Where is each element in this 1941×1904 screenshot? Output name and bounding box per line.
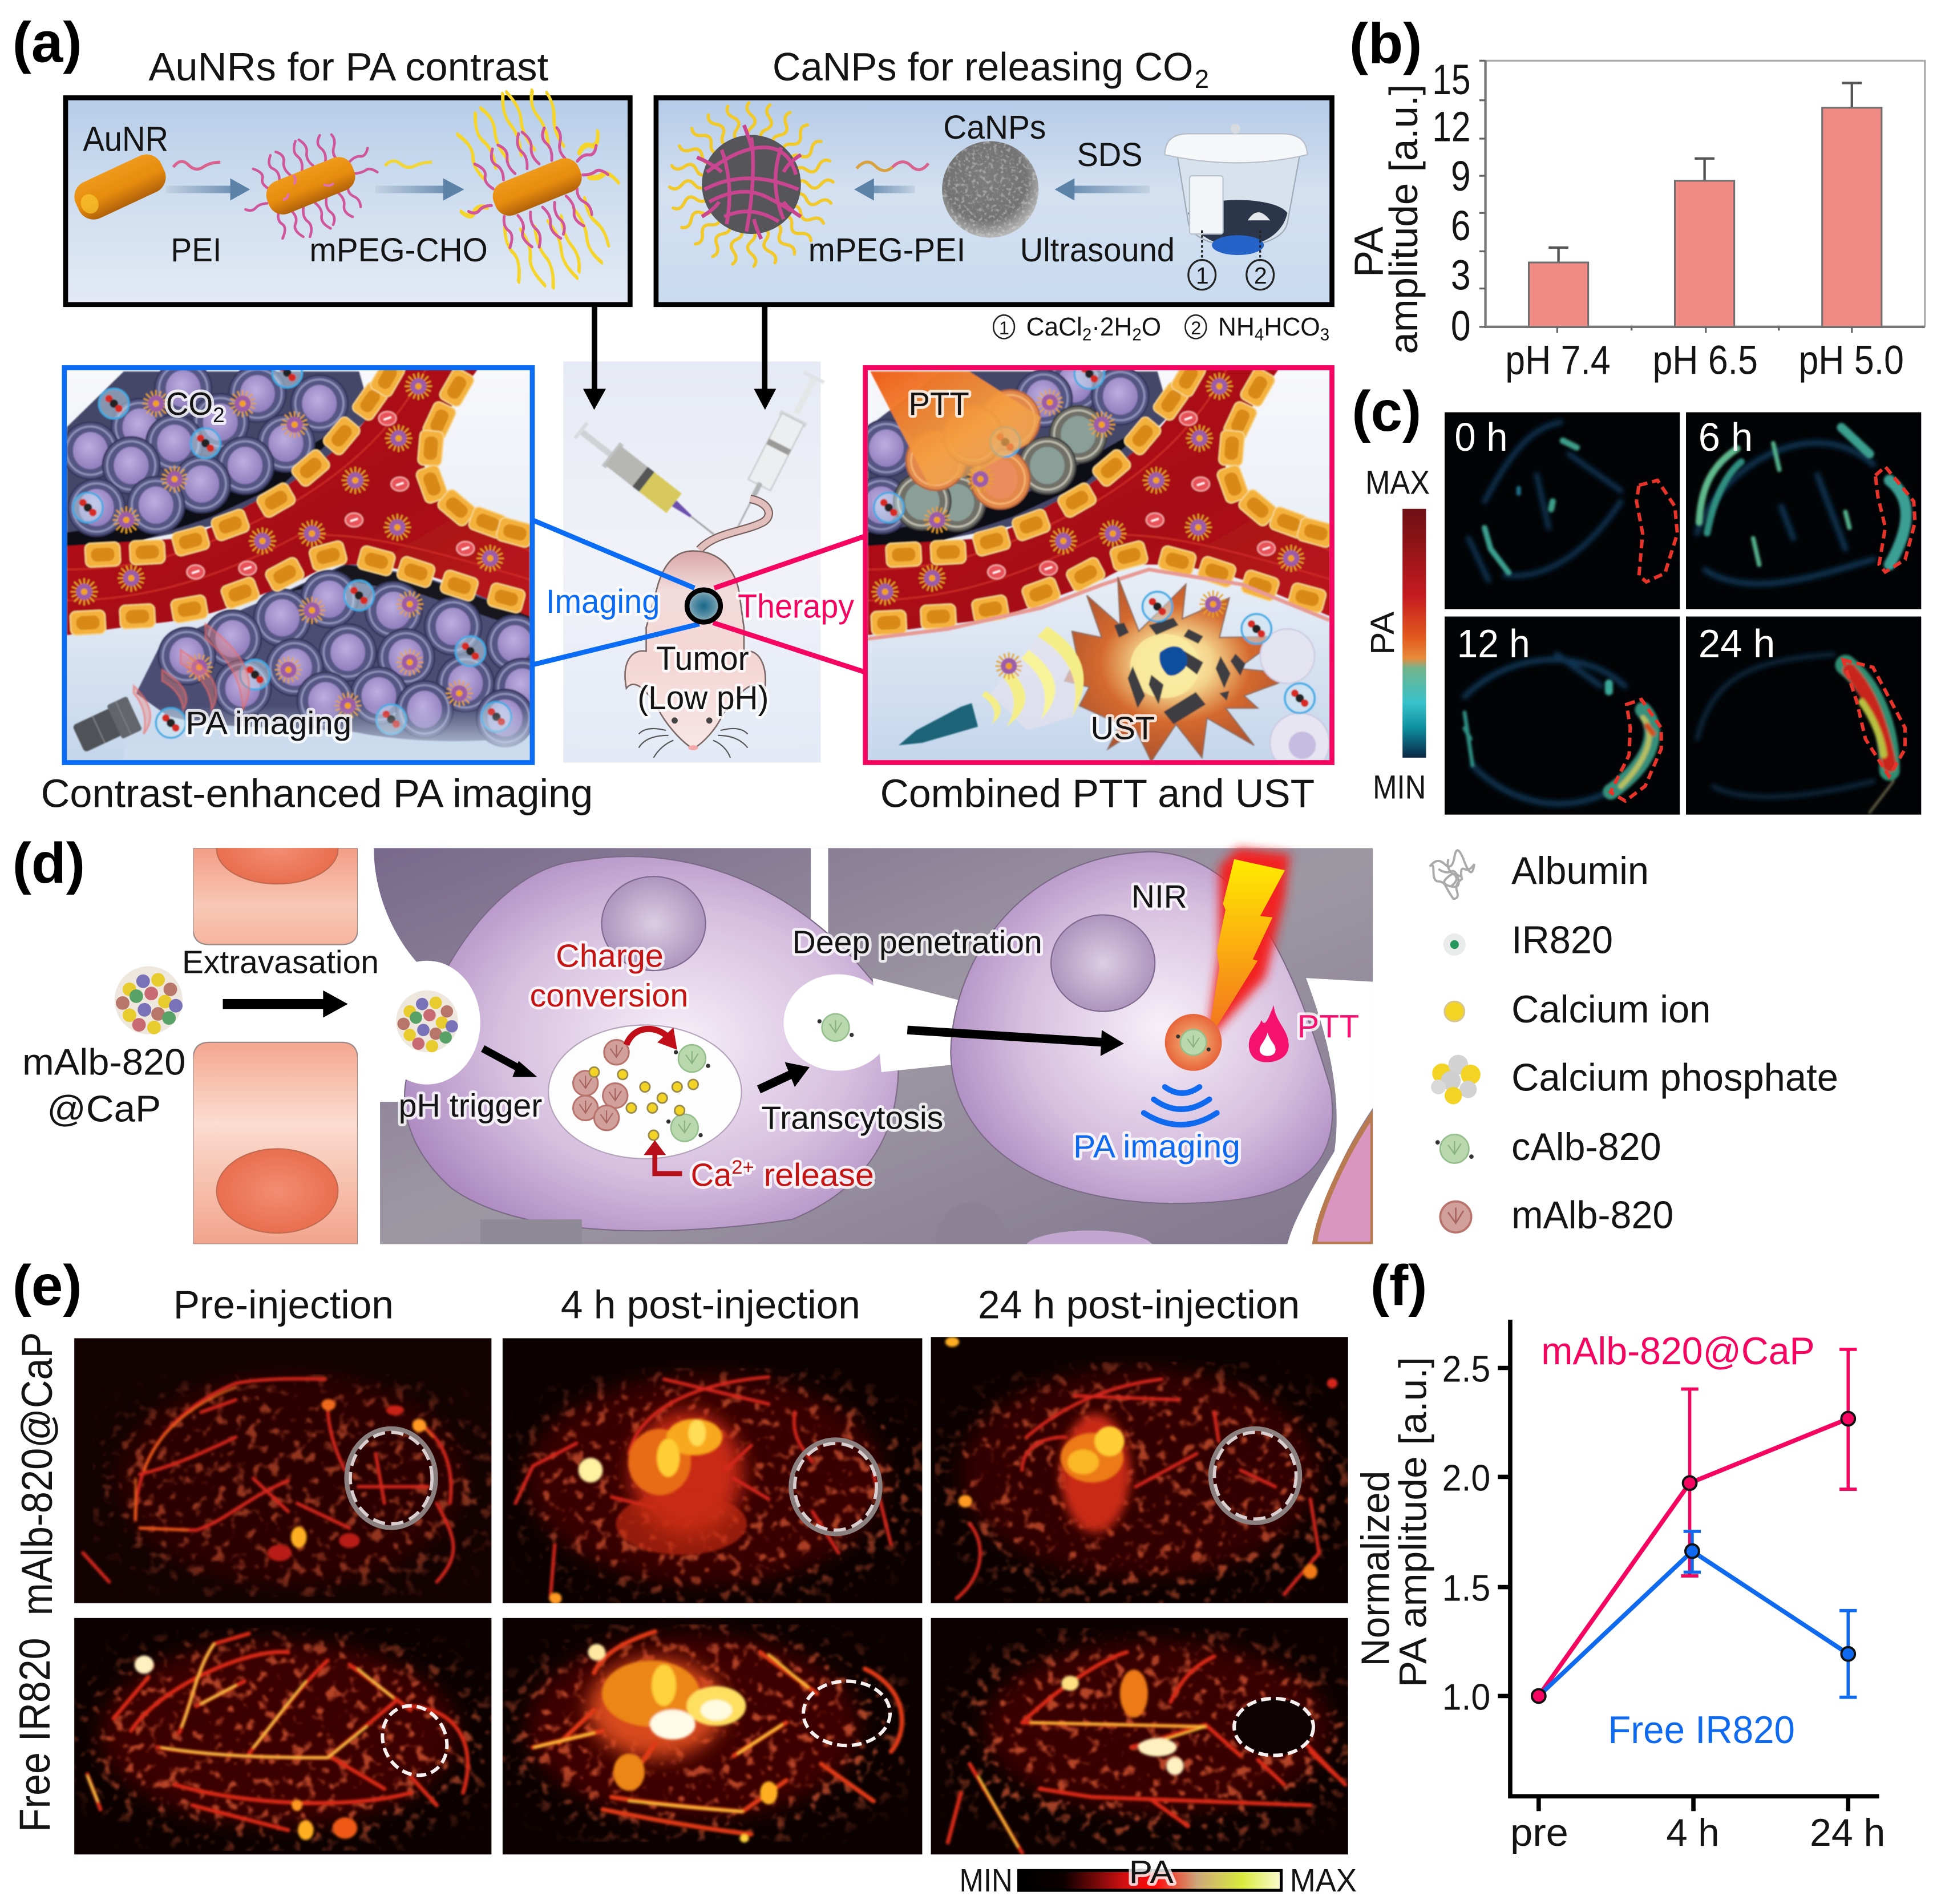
y-axis tick labels: 0 <box>1451 302 1471 350</box>
calcium release arrow <box>644 1140 682 1174</box>
arrow 2 <box>375 178 464 201</box>
cAlb in right pocket <box>818 1014 854 1041</box>
CaP label: @CaP <box>47 1088 161 1130</box>
icon: CaNP micrograph sphere <box>942 141 1038 238</box>
legend: mAlb-820 <box>1440 1194 1673 1236</box>
PEI label: PEI <box>171 232 221 269</box>
panel d: mechanism schematic <box>13 815 1838 1265</box>
y-axis title <box>1353 1357 1434 1687</box>
time label: 6 h <box>1699 415 1753 459</box>
nucleus <box>1051 915 1155 1012</box>
image 0 h <box>1445 413 1680 609</box>
Charge conversion label: Charge <box>556 938 664 974</box>
right-bottom cells <box>480 1114 1373 1265</box>
column titles <box>173 1283 1300 1327</box>
CO2 label: CO <box>166 386 213 422</box>
right pocket <box>783 975 892 1071</box>
heading: CaNPs: CaNPs for releasing CO <box>773 45 1194 89</box>
icon: PA waves <box>1144 1087 1217 1125</box>
Therapy label: Therapy <box>738 588 855 625</box>
CO2 label: 2 <box>213 403 225 427</box>
MAX label: MAX <box>1365 464 1430 502</box>
arrow: to transcytosis <box>759 1062 810 1089</box>
right white gap <box>1287 978 1373 1244</box>
panel: combined PTT and UST illustration <box>853 355 1336 773</box>
legend: IR820: IR820 <box>1511 919 1613 962</box>
x-axis labels <box>1505 337 1904 383</box>
legend: calcium phosphate <box>1431 1055 1838 1104</box>
AuNR label: AuNR <box>83 120 168 159</box>
footnote: reagents: 3 <box>1320 326 1329 345</box>
caption: combined: Combined PTT and UST <box>880 771 1315 816</box>
x-axis labels: pH 7.4 <box>1505 337 1611 383</box>
panel label f: (f) <box>1370 1254 1427 1317</box>
footnote: reagents: 2 <box>1082 326 1091 345</box>
bar pH 7.4 <box>1529 248 1588 327</box>
Ca release label: 2+ <box>731 1157 754 1178</box>
mPEG-CHO label: mPEG-CHO <box>309 232 488 269</box>
arrow: extravasation <box>223 991 348 1017</box>
connector lines: therapy <box>713 536 866 672</box>
NIR label: NIR <box>1131 878 1187 914</box>
nanoparticle in pocket <box>396 991 458 1052</box>
CaNPs label: CaNPs <box>943 109 1046 146</box>
y-axis tick labels: 2.5 <box>1442 1348 1490 1389</box>
y-axis title <box>1346 84 1426 354</box>
vesicle contents <box>573 1040 710 1141</box>
footnote: reagents: 2 <box>1132 326 1142 345</box>
chart frame <box>1479 60 1925 333</box>
PEI-coated rod <box>229 117 390 255</box>
mAlb-820@CaP label: mAlb-820@CaP <box>1541 1330 1815 1373</box>
y-axis title: PA amplitude [a.u.] <box>1392 1357 1434 1687</box>
connector lines: imaging <box>532 520 699 665</box>
tumor cluster under PTT <box>853 355 1170 555</box>
schematic illustration <box>193 815 1373 1265</box>
SDS label: SDS <box>1077 136 1143 173</box>
Tumor label: Tumor <box>656 640 749 677</box>
PA label: PA <box>1364 612 1401 655</box>
icon: clear syringe <box>725 369 828 533</box>
UST label: UST <box>1090 710 1155 746</box>
heatmap: mAlb 4 h <box>503 1338 928 1604</box>
y-axis title: PA <box>1346 227 1392 277</box>
icon: reactor vessel <box>1165 124 1307 257</box>
PTT label: PTT <box>1297 1008 1359 1044</box>
Free IR820 label: Free IR820 <box>1608 1709 1795 1752</box>
row label: mAlb-820@CaP: mAlb-820@CaP <box>13 1332 62 1615</box>
footnote: reagents: O <box>1142 312 1161 341</box>
Deep penetration label: Deep penetration <box>792 924 1042 960</box>
panel label a: (a) <box>13 11 82 75</box>
bar pH 6.5 <box>1675 159 1734 327</box>
row label: Free IR820: Free IR820 <box>11 1638 59 1832</box>
circled 1 <box>1188 260 1216 290</box>
panel: AuNR synthesis box <box>66 67 645 309</box>
panel label b: (b) <box>1349 13 1422 76</box>
column titles: Pre-injection <box>173 1283 394 1327</box>
footnote: reagents <box>993 312 1329 345</box>
column titles: 4 h post-injection <box>561 1283 860 1327</box>
coated rod with mPEG <box>426 67 645 309</box>
panel: contrast-enhanced PA imaging illustration <box>62 357 551 763</box>
MIN label: MIN <box>959 1862 1013 1898</box>
gradient bar <box>1019 1870 1281 1890</box>
icon: tumor target <box>687 590 721 622</box>
heading: CaNPs: 2 <box>1195 64 1209 94</box>
Charge conversion label: conversion <box>530 977 688 1013</box>
cell 2 <box>951 852 1332 1203</box>
PTT label: PTT <box>909 386 969 422</box>
Extravasation label: Extravasation <box>182 944 379 980</box>
cell 1 <box>374 856 899 1231</box>
vessel lower rim <box>868 569 1329 639</box>
squiggle: PEI end <box>892 162 928 169</box>
y-axis tick labels: 1.0 <box>1442 1676 1490 1717</box>
white gap <box>811 848 828 991</box>
x-axis labels: 24 h <box>1810 1812 1885 1854</box>
tumor target with cAlb <box>1165 1014 1222 1071</box>
PA imaging label: PA imaging <box>185 705 351 741</box>
icon: NIR lightning bolt <box>1207 848 1290 1042</box>
MAX label: MAX <box>1290 1862 1357 1898</box>
PA label: PA <box>1129 1854 1174 1890</box>
panel c: PA images over time <box>1352 380 1921 815</box>
footnote: reagents: ·2H <box>1091 312 1132 341</box>
lower vessel <box>193 1042 358 1244</box>
footnote: reagents: 4 <box>1255 326 1264 345</box>
icon: PA probe <box>71 696 143 756</box>
tissue background <box>374 848 1373 1244</box>
y-axis tick labels: 9 <box>1451 152 1471 200</box>
x-axis labels: 4 h <box>1666 1812 1720 1854</box>
PEI squiggle <box>173 161 220 169</box>
y-axis title: Normalized <box>1353 1471 1397 1666</box>
mPEG squiggle <box>385 161 432 167</box>
nucleus <box>601 876 706 971</box>
arrows down to mouse <box>583 305 776 410</box>
Ca release label <box>691 1157 874 1193</box>
colour bar <box>1402 509 1426 758</box>
blood vessel <box>868 357 1336 636</box>
y-axis tick labels: 12 <box>1432 103 1471 150</box>
y-axis tick labels <box>1432 56 1471 350</box>
bar pH 5.0 <box>1822 83 1882 327</box>
heatmap: free IR820 4 h <box>502 1618 922 1854</box>
mPEG-PEI label: mPEG-PEI <box>808 232 965 269</box>
shared start point <box>1532 1689 1546 1703</box>
y-axis tick labels <box>1442 1348 1490 1717</box>
icon: mouse <box>625 499 769 758</box>
heatmap: free IR820 pre-injection <box>74 1618 495 1854</box>
heatmap: free IR820 24 h <box>931 1618 1362 1854</box>
x-axis labels <box>1510 1812 1885 1854</box>
upper tumor cluster <box>62 358 371 555</box>
panel label c: (c) <box>1352 380 1421 443</box>
arrow: deep penetration <box>907 1030 1124 1056</box>
panel label e: (e) <box>13 1254 82 1317</box>
x-axis labels: pH 6.5 <box>1652 337 1758 383</box>
circled 1: 1 <box>1196 262 1209 289</box>
MIN label: MIN <box>1373 769 1426 806</box>
y-axis tick labels: 15 <box>1432 56 1471 103</box>
y-axis title: amplitude [a.u.] <box>1381 84 1426 354</box>
heatmap: mAlb pre-injection <box>74 1338 502 1603</box>
PA imaging label: PA imaging <box>1073 1129 1240 1165</box>
y-axis tick labels: 3 <box>1451 252 1471 299</box>
time label: 0 h <box>1454 415 1508 459</box>
UST explosion <box>1065 577 1301 761</box>
image 24 h <box>1686 617 1921 815</box>
panel label d: (d) <box>13 832 85 895</box>
vesicle <box>548 1025 742 1159</box>
image 12 h <box>1445 617 1680 815</box>
Ca release label: Ca <box>691 1157 732 1193</box>
Ca release label: release <box>764 1157 874 1193</box>
upper vessel <box>193 815 358 944</box>
icon: coated calcium nanoparticle <box>670 103 833 266</box>
footnote: reagents: 2 <box>1191 318 1201 338</box>
legend: IR820 <box>1443 919 1613 962</box>
series: Free IR820 <box>1539 1531 1857 1697</box>
lower tumor cluster <box>124 563 551 760</box>
x-axis labels: pre <box>1510 1812 1568 1854</box>
charge conversion arrow <box>626 1028 677 1050</box>
column titles: 24 h post-injection <box>978 1283 1300 1327</box>
PA waves <box>134 624 249 734</box>
footnote: reagents: HCO <box>1264 312 1320 341</box>
nanoparticle cluster <box>115 966 183 1034</box>
series: mAlb-820@CaP <box>1539 1349 1857 1696</box>
circled 2: 2 <box>1254 262 1267 289</box>
y-axis tick labels: 1.5 <box>1442 1567 1490 1608</box>
Transcytosis label: Transcytosis <box>761 1100 943 1136</box>
footnote: reagents: CaCl <box>1026 312 1084 341</box>
icon: yellow syringe <box>571 418 723 546</box>
panel a: nanoparticle design and mouse schematic <box>13 11 1336 816</box>
axes <box>1498 1320 1879 1811</box>
icon: flame <box>1249 1005 1289 1062</box>
time label: 24 h <box>1699 621 1775 666</box>
y-axis tick labels: 2.0 <box>1442 1457 1490 1498</box>
squiggle: mPEG-PEI <box>856 162 892 171</box>
legend: albumin <box>1430 850 1649 899</box>
heading: AuNRs: AuNRs for PA contrast <box>148 45 548 89</box>
footnote: reagents: NH <box>1218 312 1256 341</box>
PTT beam <box>870 371 1041 487</box>
white channel <box>358 848 433 1244</box>
y-axis tick labels: 6 <box>1451 202 1471 249</box>
arrow: to vesicle <box>483 1049 537 1077</box>
legend: cAlb-820 <box>1435 1126 1661 1169</box>
arrow 1 <box>166 178 250 201</box>
circled 2 <box>1247 260 1274 290</box>
Ultrasound label: Ultrasound <box>1020 232 1175 269</box>
panel: CaNP synthesis box <box>656 98 1332 305</box>
legend: calcium ion: Calcium ion <box>1511 988 1710 1031</box>
mouse injection schematic <box>563 362 828 763</box>
left pocket <box>374 961 480 1085</box>
time label: 12 h <box>1457 621 1530 666</box>
icon: UST probe <box>899 703 978 745</box>
panel e: PA heat-map images <box>11 1254 1362 1898</box>
Imaging label: Imaging <box>546 583 660 620</box>
arrow left 2 <box>1055 178 1150 201</box>
x-axis labels: pH 5.0 <box>1798 337 1904 383</box>
legend: mAlb-820: mAlb-820 <box>1511 1194 1673 1236</box>
legend: calcium phosphate: Calcium phosphate <box>1511 1057 1838 1099</box>
Low pH label: (Low pH) <box>637 680 769 717</box>
legend <box>1430 850 1838 1236</box>
white gap between cells <box>873 978 959 1072</box>
neighbouring pale cells <box>995 591 1329 773</box>
image 6 h <box>1686 413 1921 609</box>
mAlb-820 label: mAlb-820 <box>22 1041 185 1082</box>
panel b: bar chart <box>1346 13 1925 383</box>
ultrasound waves <box>982 626 1083 730</box>
blood vessel <box>67 357 535 636</box>
pH trigger label: pH trigger <box>399 1088 542 1123</box>
caption: contrast-enhanced: Contrast-enhanced PA imaging <box>41 771 593 816</box>
heatmap: mAlb 24 h <box>931 1337 1356 1610</box>
colour scale <box>959 1854 1357 1898</box>
panel f: line chart <box>1353 1254 1885 1854</box>
Charge conversion label <box>530 938 688 1013</box>
footnote: reagents: 1 <box>999 318 1009 338</box>
arrow left 1 <box>854 178 915 201</box>
icon: gold nanorod <box>69 149 171 225</box>
legend: cAlb-820: cAlb-820 <box>1511 1126 1661 1169</box>
legend: albumin: Albumin <box>1511 850 1649 892</box>
